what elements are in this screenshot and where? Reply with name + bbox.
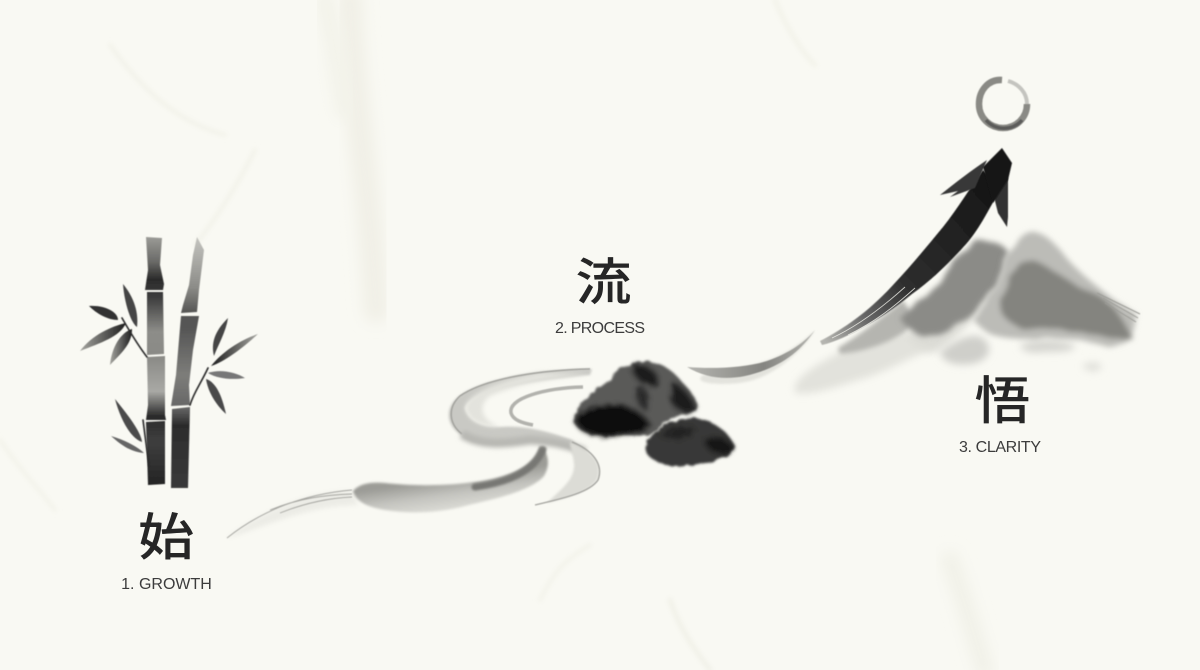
river: lower band bbox=[353, 445, 548, 512]
arrow: head bbox=[983, 148, 1012, 203]
river: upper band bbox=[449, 369, 592, 458]
rock: large bbox=[573, 362, 697, 437]
bamboo: right stalk bbox=[171, 237, 204, 488]
river: inner curl bbox=[511, 387, 583, 425]
label: 2. PROCESS: 2. PROCESS bbox=[555, 320, 645, 337]
bamboo: left stalk bbox=[145, 237, 166, 485]
river: dark crescent bbox=[475, 449, 543, 487]
arrow stroke bbox=[820, 148, 1012, 345]
bamboo: leaves bbox=[80, 284, 258, 466]
arrow: left wing bbox=[940, 160, 987, 197]
mountain: ridge lines bbox=[1097, 293, 1140, 322]
mountain: left ridge bbox=[900, 239, 1011, 336]
river: tail bbox=[227, 490, 358, 538]
arrow: right wing bbox=[993, 177, 1008, 227]
river brush stroke bbox=[227, 369, 600, 538]
kanji: 悟: 悟 bbox=[975, 373, 1030, 430]
label: 3. CLARITY: 3. CLARITY bbox=[959, 439, 1041, 456]
enso circle bbox=[979, 80, 1027, 128]
mountain: pale body bbox=[905, 270, 1000, 353]
rock: small bbox=[645, 418, 735, 466]
river: outer right band bbox=[535, 442, 600, 505]
mountain: lower haze bbox=[940, 336, 1102, 371]
rocks bbox=[573, 362, 735, 466]
mountain: lower left band bbox=[838, 300, 915, 354]
arrow: shaft bbox=[820, 170, 1000, 345]
kanji: 始: 始 bbox=[138, 511, 194, 566]
bridge brush stroke bbox=[687, 330, 815, 384]
mountain bbox=[794, 233, 1140, 394]
mountain: right peak bbox=[972, 233, 1138, 347]
bamboo illustration bbox=[80, 237, 258, 488]
mountain: mist bbox=[794, 333, 928, 394]
arrow: dry brush streaks bbox=[832, 287, 915, 338]
label: 1. GROWTH: 1. GROWTH bbox=[121, 576, 212, 593]
kanji: 流: 流 bbox=[576, 256, 631, 311]
